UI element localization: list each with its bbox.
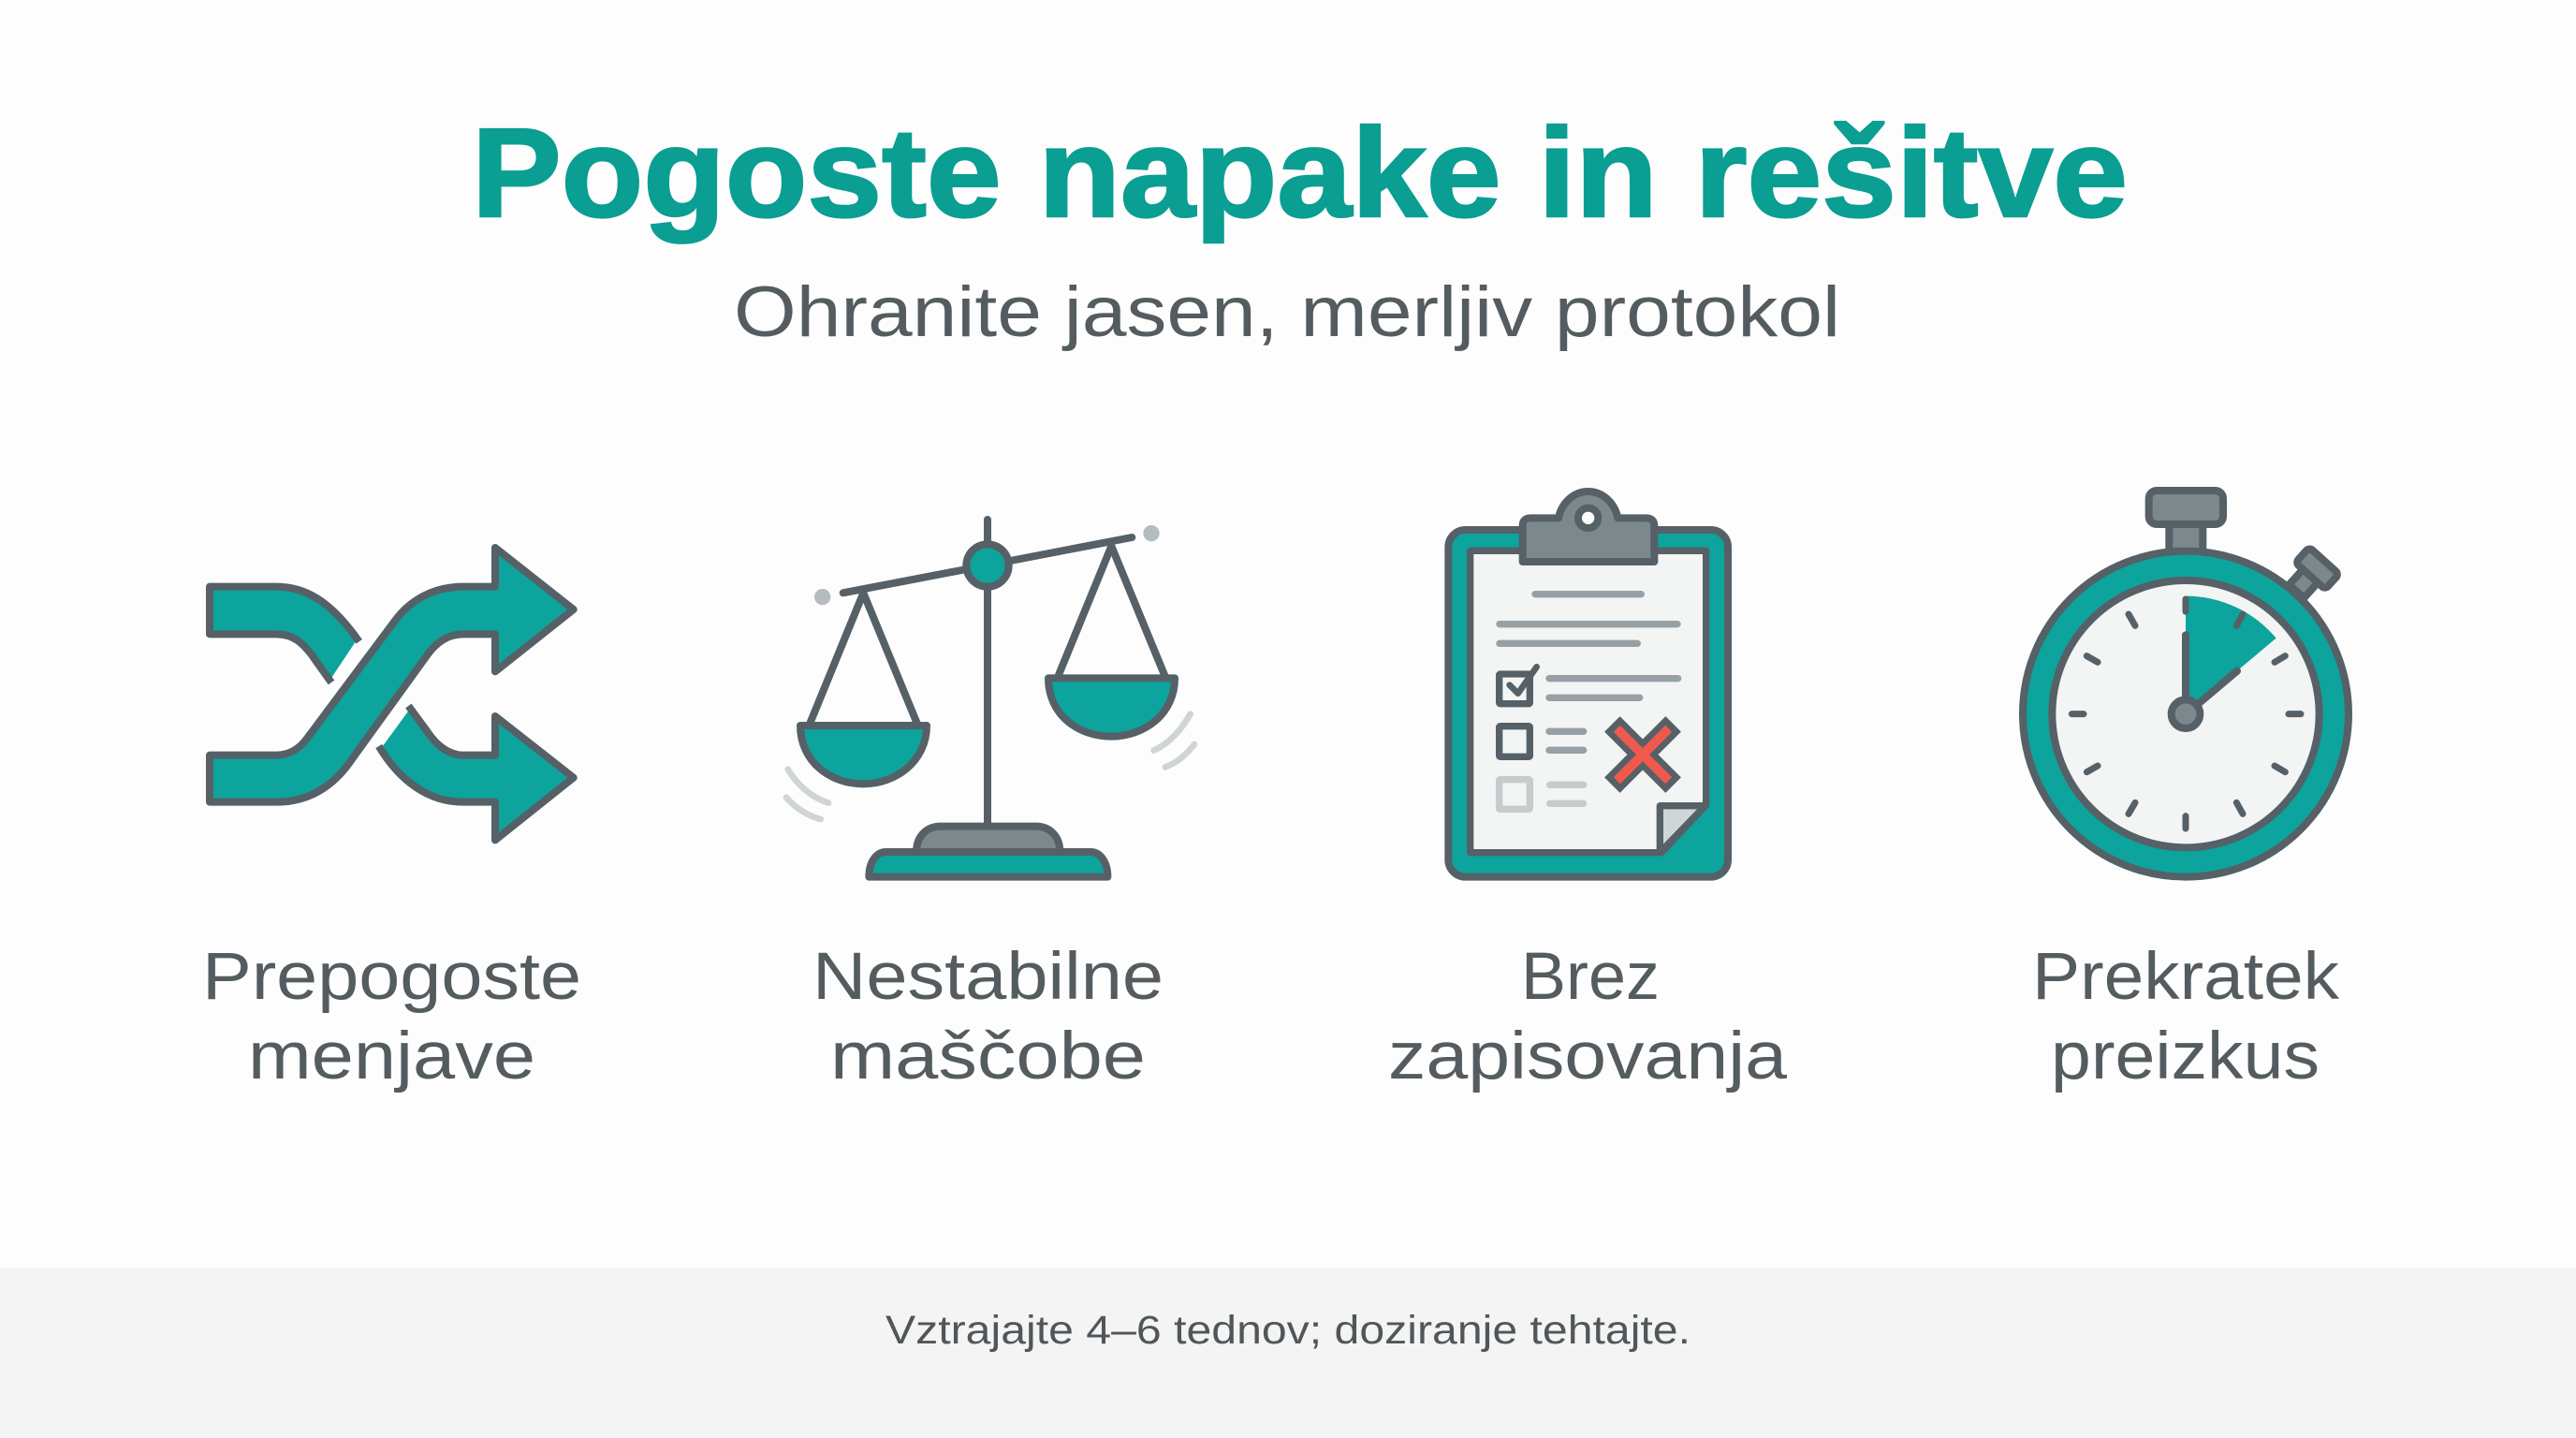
label: Prepogoste menjave: Prepogoste — [202, 940, 581, 1014]
footer band — [0, 1268, 2576, 1438]
label: Prekratek preizkus — [2032, 940, 2340, 1093]
footer note: Vztrajajte 4–6 tednov; doziranje tehtajte. — [886, 1308, 1690, 1353]
icon: stopwatch — [2023, 491, 2349, 877]
panel: brez zapisovanja — [1388, 492, 1788, 1093]
label: Brez zapisovanja: zapisovanja — [1388, 1020, 1788, 1093]
label: Nestabilne maščobe: maščobe — [830, 1020, 1146, 1093]
label: Brez zapisovanja — [1388, 940, 1788, 1093]
icon: clipboard with checklist and red cross — [1448, 492, 1728, 877]
label: Nestabilne maščobe: Nestabilne — [812, 940, 1164, 1014]
title: Pogoste napake in rešitve — [472, 102, 2128, 243]
label: Prepogoste menjave: menjave — [248, 1020, 535, 1093]
subtitle: Ohranite jasen, merljiv protokol — [734, 272, 1840, 352]
icon: unbalanced scale — [786, 520, 1194, 877]
icon: crossing shuffle arrows — [210, 548, 574, 840]
panel: prepogoste menjave — [202, 548, 581, 1093]
label: Prekratek preizkus: preizkus — [2051, 1020, 2320, 1093]
label: Prekratek preizkus: Prekratek — [2032, 940, 2340, 1014]
panel: prekratek preizkus — [2023, 491, 2349, 1093]
label: Brez zapisovanja: Brez — [1521, 940, 1660, 1014]
panel: nestabilne maščobe — [786, 520, 1194, 1093]
label: Nestabilne maščobe — [812, 940, 1164, 1093]
label: Prepogoste menjave — [202, 940, 581, 1093]
